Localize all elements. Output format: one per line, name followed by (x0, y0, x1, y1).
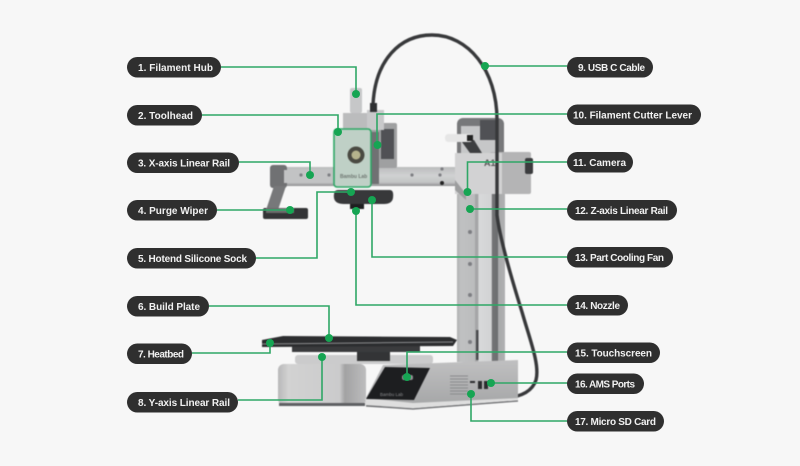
label: 6. Build Plate (127, 296, 209, 316)
base (278, 355, 518, 409)
label: 14. Nozzle (567, 295, 628, 316)
label: 11. Camera (567, 152, 633, 172)
build plate and heatbed (262, 336, 457, 361)
label: 12. Z-axis Linear Rail: 12. Z-axis Linear Rail (575, 206, 668, 217)
label: 8. Y-axis Linear Rail: 8. Y-axis Linear Rail (138, 398, 230, 409)
label: 10. Filament Cutter Lever (567, 104, 701, 125)
Z-axis column (457, 118, 505, 362)
filament cutter handle (445, 134, 482, 153)
label: 3. X-axis Linear Rail (127, 152, 239, 173)
label: 8. Y-axis Linear Rail (127, 392, 238, 412)
label: 4. Purge Wiper (127, 200, 217, 220)
label: 9. USB C Cable (567, 57, 653, 78)
front plate: Bambu Lab (340, 174, 367, 180)
vent (450, 376, 468, 394)
label: 15. Touchscreen (567, 342, 660, 363)
touchscreen (366, 367, 430, 400)
label: 11. Camera: 11. Camera (573, 158, 626, 169)
purge wiper (263, 186, 308, 219)
label: 1. Filament Hub: 1. Filament Hub (138, 63, 213, 74)
label: 1. Filament Hub (127, 57, 221, 78)
label: 7. Heatbed (127, 344, 192, 364)
label: 3. X-axis Linear Rail: 3. X-axis Linear Rail (138, 158, 230, 170)
3D printer illustration (262, 35, 537, 409)
toolhead (334, 88, 397, 209)
connector dots (266, 62, 495, 398)
connector lines (192, 66, 567, 421)
label: 13. Part Cooling Fan: 13. Part Cooling Fan (575, 253, 664, 264)
USB C cable (373, 35, 537, 398)
label: 2. Toolhead (127, 105, 202, 126)
label: 16. AMS Ports (567, 374, 644, 394)
label: 5. Hotend Silicone Sock (127, 248, 256, 268)
label: 2. Toolhead: 2. Toolhead (138, 111, 193, 122)
label: 7. Heatbed: 7. Heatbed (138, 350, 184, 360)
label: 17. Micro SD Card: 17. Micro SD Card (575, 417, 656, 428)
touchscreen: Bambu Lab (380, 392, 404, 397)
X-axis rail (270, 165, 460, 188)
label: 14. Nozzle: 14. Nozzle (575, 301, 620, 312)
label: 10. Filament Cutter Lever: 10. Filament Cutter Lever (573, 110, 692, 122)
carriage with A1 badge (445, 134, 533, 200)
label: 12. Z-axis Linear Rail (567, 200, 677, 220)
ports (470, 381, 488, 389)
label: 13. Part Cooling Fan (567, 247, 673, 268)
label: 16. AMS Ports: 16. AMS Ports (575, 380, 635, 390)
label: 17. Micro SD Card (567, 411, 664, 432)
label: 6. Build Plate: 6. Build Plate (138, 302, 200, 313)
label: 15. Touchscreen: 15. Touchscreen (575, 348, 652, 360)
label: 4. Purge Wiper: 4. Purge Wiper (138, 206, 208, 217)
label: 9. USB C Cable: 9. USB C Cable (578, 63, 645, 74)
badge text: A1 (484, 158, 496, 168)
label: 5. Hotend Silicone Sock: 5. Hotend Silicone Sock (138, 254, 247, 265)
